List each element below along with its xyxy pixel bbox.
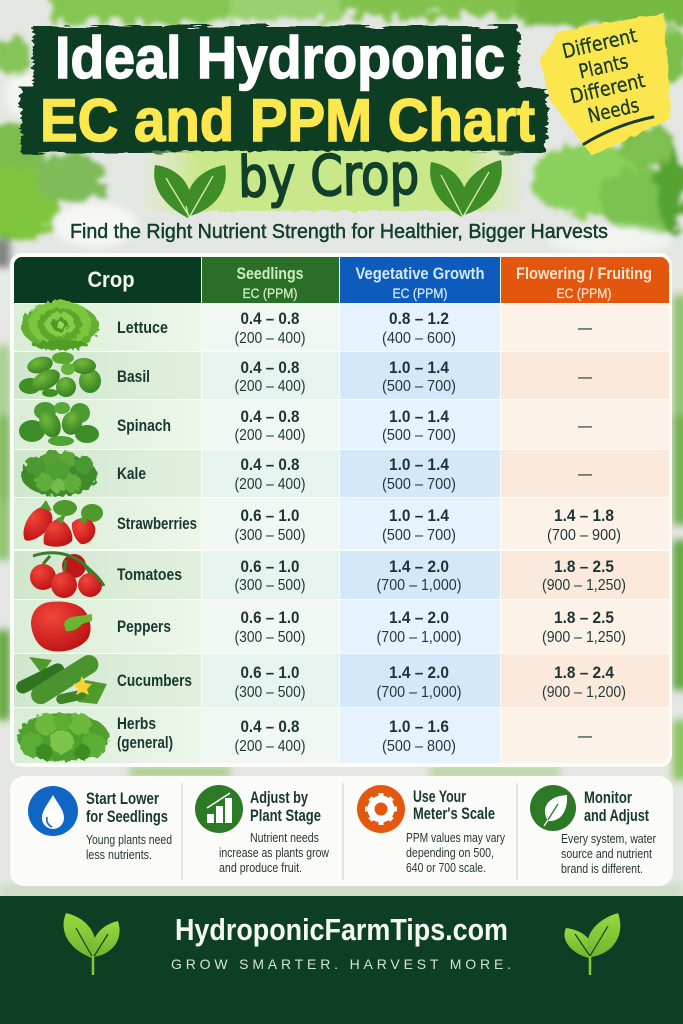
row: herbs: — [578, 727, 592, 745]
table header: EC (PPM) [392, 285, 448, 301]
tip: start lower: for Seedlings [86, 807, 168, 826]
row: lettuce: (200 – 400) [234, 330, 306, 347]
icon: kale [21, 450, 97, 496]
row: peppers: Peppers [117, 618, 171, 636]
website: HydroponicFarmTips.com [175, 912, 508, 947]
icon: basil [19, 352, 101, 397]
row: strawberries: 0.6 – 1.0 [240, 507, 300, 525]
row: cucumbers: 1.8 – 2.4 [554, 664, 615, 682]
tip: adjust by plant stage: Adjust by [250, 788, 308, 807]
row: strawberries: 1.0 – 1.4 [389, 507, 450, 525]
tip: adjust by plant stage: and produce fruit. [219, 860, 302, 875]
callout note: different plants different needs: Different [560, 23, 639, 63]
table header: EC (PPM) [556, 285, 612, 301]
row: lettuce: 0.4 – 0.8 [240, 310, 300, 328]
title banner [21, 25, 547, 154]
icon: water drop [28, 786, 78, 836]
tip: use your meter's scale: Use Your [413, 787, 466, 806]
row: herbs: 1.0 – 1.6 [389, 718, 449, 736]
table header: Vegetative Growth [356, 264, 484, 283]
tip: start lower: less nutrients. [86, 847, 152, 862]
tip: monitor and adjust: Monitor [584, 788, 632, 807]
icon: gear [357, 785, 405, 833]
panel: chart table [10, 253, 672, 767]
row: kale: (500 – 700) [382, 476, 456, 493]
row: kale: 0.4 – 0.8 [240, 456, 300, 474]
row: spinach: 1.0 – 1.4 [389, 408, 450, 426]
row: lettuce [21, 300, 592, 350]
tip: monitor and adjust: and Adjust [584, 806, 649, 825]
row: spinach [19, 402, 592, 446]
tip: adjust by plant stage [195, 785, 329, 875]
row: spinach: Spinach [117, 417, 171, 435]
tip: adjust by plant stage: Plant Stage [250, 806, 321, 825]
row: cucumbers: Cucumbers [117, 672, 192, 690]
row: herbs [17, 713, 592, 761]
row: herbs: (200 – 400) [234, 738, 306, 755]
slogan: GROW SMARTER. HARVEST MORE. [171, 956, 511, 972]
callout note: different plants different needs: Needs [585, 93, 641, 128]
row: basil: (500 – 700) [382, 378, 456, 395]
row: tomatoes: (700 – 1,000) [376, 577, 462, 594]
title line 1: Ideal Hydroponic [55, 25, 505, 91]
table header: Flowering / Fruiting [516, 264, 652, 283]
row: cucumbers: 1.4 – 2.0 [389, 664, 449, 682]
tip: start lower: Start Lower [86, 789, 159, 808]
row: cucumbers: (700 – 1,000) [376, 684, 462, 701]
row: peppers: (900 – 1,250) [542, 629, 626, 646]
row: lettuce: (400 – 600) [382, 330, 456, 347]
icon: leaf [530, 785, 576, 831]
dark brush background [21, 26, 547, 153]
tip: use your meter's scale: PPM values may vary [406, 830, 505, 845]
row: tomatoes: Tomatoes [117, 566, 182, 584]
row: spinach: (200 – 400) [234, 427, 306, 444]
row: spinach: 0.4 – 0.8 [240, 408, 300, 426]
row: strawberries: 1.4 – 1.8 [554, 507, 614, 525]
icon: herbs [17, 713, 109, 761]
row: lettuce: — [578, 319, 592, 337]
row: tomatoes: (900 – 1,250) [542, 577, 626, 594]
row: cucumbers: 0.6 – 1.0 [240, 664, 300, 682]
table header: EC (PPM) [242, 285, 298, 301]
row: tomatoes: (300 – 500) [234, 577, 306, 594]
tip: adjust by plant stage: Nutrient needs [250, 830, 319, 845]
icon: cucumbers [14, 651, 107, 708]
row: kale: Kale [117, 465, 146, 483]
row: peppers: 1.8 – 2.5 [554, 609, 614, 627]
row: strawberries [24, 500, 621, 547]
icon: leaves left [154, 165, 226, 218]
icon: footer leaves left [64, 913, 120, 975]
tip: use your meter's scale: 640 or 700 scale. [406, 860, 486, 875]
callout note: different plants different needs [540, 13, 671, 156]
title line 2: EC and PPM Chart [40, 87, 535, 154]
tip: monitor and adjust [530, 785, 657, 876]
icon: growth bars [195, 785, 243, 833]
row: lettuce: 0.8 – 1.2 [389, 310, 449, 328]
row: peppers [31, 601, 626, 652]
row: cucumbers [14, 651, 626, 708]
icon: strawberries [24, 500, 103, 547]
tip: monitor and adjust: brand is different. [561, 861, 643, 876]
row: kale: (200 – 400) [234, 476, 306, 493]
row: basil [19, 352, 592, 397]
row: herbs: (general) [117, 734, 173, 752]
panel: tips [10, 776, 673, 886]
row: kale: — [578, 465, 592, 483]
lime brush [144, 151, 524, 211]
row: kale: 1.0 – 1.4 [389, 456, 450, 474]
row: spinach: — [578, 417, 592, 435]
row: peppers: (700 – 1,000) [376, 629, 462, 646]
row: herbs: Herbs [117, 715, 156, 733]
icon: tomatoes [30, 553, 104, 598]
icon: spinach [19, 402, 99, 446]
row: peppers: 1.4 – 2.0 [389, 609, 449, 627]
row: basil: 0.4 – 0.8 [240, 359, 300, 377]
row: strawberries: (500 – 700) [382, 527, 456, 544]
tip: start lower [28, 786, 172, 862]
tip: adjust by plant stage: increase as plants grow [219, 845, 329, 860]
row: tomatoes [30, 553, 626, 598]
tip: monitor and adjust: source and nutrient [561, 846, 652, 861]
tip: use your meter's scale: depending on 500, [406, 845, 494, 860]
tip: use your meter's scale [357, 785, 505, 875]
row: strawberries: (700 – 900) [547, 527, 621, 544]
tip: start lower: Young plants need [86, 832, 172, 847]
by Crop text: by Crop [238, 142, 420, 211]
row: kale [21, 450, 592, 496]
callout note: different plants different needs: Plants [576, 49, 630, 83]
row: tomatoes: 1.8 – 2.5 [554, 558, 614, 576]
icon: lettuce [21, 300, 99, 350]
tagline: Find the Right Nutrient Strength for Healthier, Bigger Harvests [70, 221, 608, 243]
row: strawberries: Strawberries [117, 515, 197, 533]
table row shading [14, 304, 669, 763]
row: lettuce: Lettuce [117, 319, 168, 337]
table header: Crop [88, 267, 134, 292]
icon: pepper [31, 601, 92, 652]
table header [14, 257, 669, 303]
row: basil: (200 – 400) [234, 378, 306, 395]
row: cucumbers: (300 – 500) [234, 684, 306, 701]
row: tomatoes: 0.6 – 1.0 [240, 558, 300, 576]
row: tomatoes: 1.4 – 2.0 [389, 558, 449, 576]
subtitle band: by Crop [144, 142, 524, 218]
icon: leaves right [430, 160, 502, 217]
row: peppers: 0.6 – 1.0 [240, 609, 300, 627]
row: basil: — [578, 368, 592, 386]
footer band [0, 896, 683, 1024]
row: herbs: (500 – 800) [382, 738, 456, 755]
row: spinach: (500 – 700) [382, 427, 456, 444]
icon: footer leaves right [564, 913, 620, 975]
row: cucumbers: (900 – 1,200) [542, 684, 626, 701]
row: basil: 1.0 – 1.4 [389, 359, 450, 377]
tip: use your meter's scale: Meter's Scale [413, 804, 495, 823]
row: peppers: (300 – 500) [234, 629, 306, 646]
tip: monitor and adjust: Every system, water [561, 831, 657, 846]
callout note: different plants different needs: Different [568, 68, 647, 108]
table header: Seedlings [236, 264, 304, 283]
row: basil: Basil [117, 368, 150, 386]
row: herbs: 0.4 – 0.8 [240, 718, 300, 736]
row: strawberries: (300 – 500) [234, 527, 306, 544]
